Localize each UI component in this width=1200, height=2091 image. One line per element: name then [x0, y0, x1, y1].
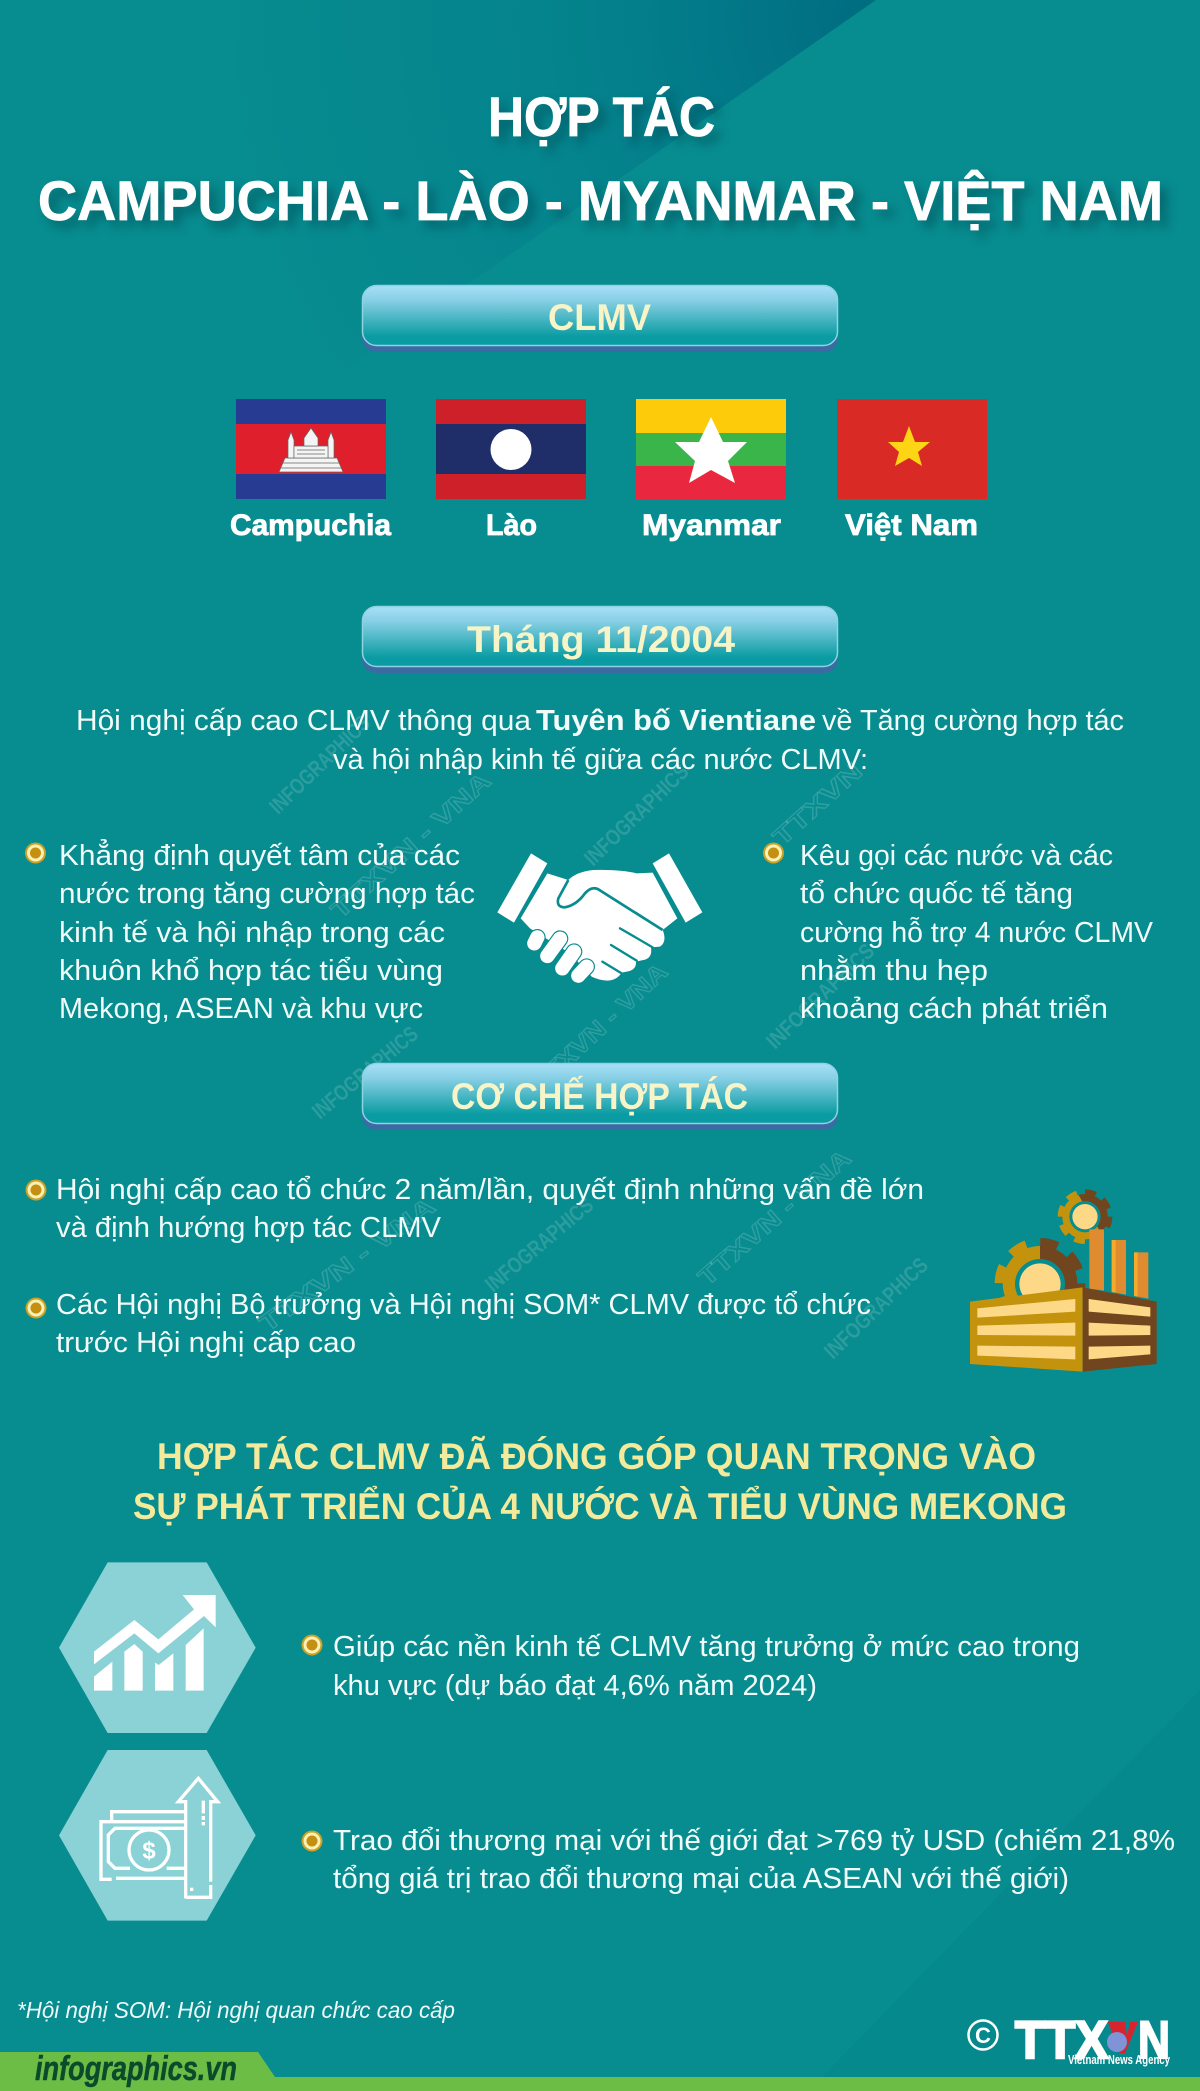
- watermarks: INFOGRAPHICS: [480, 1192, 598, 1297]
- banner: Cơ chế hợp tác: CƠ CHẾ HỢP TÁC: [451, 1076, 748, 1117]
- watermarks: INFOGRAPHICS: [819, 1253, 933, 1364]
- growth text: [302, 1631, 1080, 1702]
- footnote: *Hội nghị SOM: Hội nghị quan chức cao cấp: [17, 1997, 455, 2023]
- watermarks: [255, 710, 933, 1364]
- mechanism bullet 2: [26, 1289, 871, 1359]
- watermarks: INFOGRAPHICS: [761, 938, 879, 1054]
- flag labels: Việt Nam: [845, 509, 978, 542]
- logo: TTXVN: [968, 2011, 1171, 2070]
- heading: contributions: SỰ PHÁT TRIỂN CỦA 4 NƯỚC VÀ TIỂU VÙNG MEKONG: [133, 1485, 1067, 1527]
- flag: Myanmar: [636, 399, 786, 499]
- flag: Laos: [436, 399, 586, 499]
- trade text: Trao đổi thương mại với thế giới đạt >769 tỷ USD (chiếm 21,8%: [333, 1825, 1175, 1857]
- right bullet text: tổ chức quốc tế tăng: [800, 878, 1073, 910]
- banner: Cơ chế hợp tác: [362, 1064, 838, 1130]
- logo: TTXVN: C: [975, 2023, 991, 2048]
- heading: contributions: HỢP TÁC CLMV ĐÃ ĐÓNG GÓP QUAN TRỌNG VÀO: [157, 1435, 1036, 1477]
- flag: Vietnam: [837, 399, 987, 499]
- left bullet text: [25, 838, 475, 1025]
- title: HỢP TÁC: [488, 85, 715, 148]
- banner: CLMV: [362, 286, 838, 352]
- footer bar: [0, 2050, 1200, 2091]
- right bullet text: khoảng cách phát triển: [800, 993, 1108, 1025]
- trade text: tổng giá trị trao đổi thương mại của ASEAN với thế giới): [333, 1863, 1069, 1895]
- banner: CLMV: CLMV: [548, 297, 651, 338]
- mechanism bullet 1: Hội nghị cấp cao tổ chức 2 năm/lần, quyết định những vấn đề lớn: [56, 1174, 924, 1206]
- icon: Angkor Wat: [279, 428, 343, 472]
- flag labels: [230, 509, 978, 542]
- intro text: về Tăng cường hợp tác: [822, 705, 1124, 737]
- left bullet text: nước trong tăng cường hợp tác: [59, 878, 475, 910]
- title: CAMPUCHIA - LÀO - MYANMAR - VIỆT NAM: [38, 169, 1163, 232]
- mechanism bullet 2: trước Hội nghị cấp cao: [56, 1327, 356, 1359]
- intro text: Tuyên bố Vientiane: [536, 705, 816, 737]
- right bullet text: cường hỗ trợ 4 nước CLMV: [800, 916, 1154, 949]
- intro text: Hội nghị cấp cao CLMV thông qua: [76, 705, 532, 737]
- left bullet text: Khẳng định quyết tâm của các: [59, 838, 460, 872]
- icon: handshake: [497, 853, 702, 981]
- watermarks: INFOGRAPHICS: [264, 710, 375, 819]
- flag: Cambodia: [236, 399, 386, 499]
- watermarks: INFOGRAPHICS: [579, 759, 694, 871]
- heading: contributions: [133, 1435, 1067, 1527]
- watermarks: TTXVN: [768, 758, 868, 851]
- watermarks: TTXVN - VNA: [527, 958, 673, 1097]
- intro text: [76, 705, 1124, 776]
- logo: TTXVN: TTX: [1015, 2011, 1108, 2070]
- footer bar: infographics.vn: [35, 2050, 237, 2088]
- growth text: khu vực (dự báo đạt 4,6% năm 2024): [333, 1670, 817, 1702]
- banner: Tháng 11/2004: Tháng 11/2004: [467, 619, 735, 660]
- trade text: [302, 1825, 1175, 1895]
- growth text: Giúp các nền kinh tế CLMV tăng trưởng ở mức cao trong: [333, 1631, 1080, 1663]
- icon: growth chart hexagon: [59, 1562, 256, 1733]
- logo: TTXVN: N: [1138, 2011, 1170, 2070]
- icon: money arrow hexagon: $: [142, 1837, 156, 1864]
- mechanism bullet 1: và định hướng hợp tác CLMV: [56, 1212, 442, 1244]
- flag labels: Lào: [486, 509, 537, 542]
- watermarks: TTXVN - VNA: [255, 1193, 440, 1338]
- left bullet text: Mekong, ASEAN và khu vực: [59, 993, 423, 1025]
- icon: money arrow hexagon: [59, 1750, 256, 1921]
- left bullet text: khuôn khổ hợp tác tiểu vùng: [59, 955, 443, 987]
- icon: factory: [970, 1193, 1157, 1372]
- right bullet text: [763, 840, 1154, 1025]
- title: [38, 85, 1163, 232]
- right bullet text: Kêu gọi các nước và các: [800, 840, 1113, 872]
- watermarks: TTXVN - VNA: [693, 1145, 857, 1292]
- right bullet text: nhằm thu hẹp: [800, 954, 988, 987]
- banner: Tháng 11/2004: [362, 606, 838, 673]
- flag labels: Myanmar: [642, 509, 781, 542]
- mechanism bullet 1: [26, 1174, 924, 1244]
- mechanism bullet 2: Các Hội nghị Bộ trưởng và Hội nghị SOM* CLMV được tổ chức: [56, 1289, 871, 1321]
- watermarks: INFOGRAPHICS: [307, 1021, 423, 1124]
- left bullet text: kinh tế và hội nhập trong các: [59, 917, 445, 949]
- watermarks: TTXVN - VNA: [326, 767, 496, 924]
- intro text: và hội nhập kinh tế giữa các nước CLMV:: [333, 744, 868, 776]
- flag labels: Campuchia: [230, 509, 391, 542]
